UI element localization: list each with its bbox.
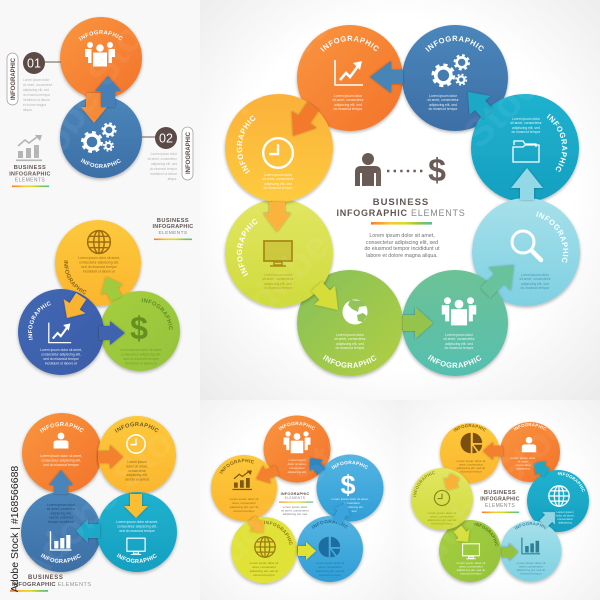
heading: ELEMENTS <box>158 230 188 236</box>
circle: yellow green step: adipiscing elit, sed <box>264 282 292 286</box>
circle: orange: sit amet, <box>517 460 529 464</box>
circle: orange yellow: INFOGRAPHIC <box>219 458 254 474</box>
circle: orange: sed do eiusmod tempor <box>43 463 80 467</box>
arrow: blue to orange <box>49 470 73 494</box>
circle: orange step: adipiscing elit, sed <box>334 103 362 107</box>
circle: teal: Lorem ipsum <box>556 510 574 514</box>
circle: yellow: INFOGRAPHIC <box>114 422 158 433</box>
arrow: yellow to yellow green <box>439 472 463 494</box>
arrow: light blue to teal <box>511 168 543 200</box>
circle: yellow green: amet, consectetur <box>252 565 276 569</box>
circle: blue: INFOGRAPHIC <box>40 553 81 563</box>
circle: green: sed do eiusmod tempor <box>123 357 160 361</box>
circle: orange: adipiscing <box>516 466 530 470</box>
circle: teal: sed do eiusmod tempor <box>119 529 156 533</box>
arrow: orange to yellow <box>281 98 326 144</box>
pill label right: INFOGRAPHIC <box>186 131 192 174</box>
circle: blue step: sit amet, consectetur <box>427 98 460 102</box>
circle: green: consectetur adipiscing elit, <box>121 352 161 356</box>
circle: yellow: Lorem ipsum <box>127 460 147 464</box>
pill label right <box>182 127 193 180</box>
circle: yellow green step: Lorem ipsum dolor <box>264 273 293 277</box>
circle: blue step: INFOGRAPHIC <box>425 36 484 52</box>
circle: light blue: amet, consectetur <box>519 564 543 568</box>
circle: teal step: Lorem ipsum dolor <box>512 117 541 121</box>
circle: orange <box>498 422 562 486</box>
circle: yellow orange step: adipiscing elit, sed <box>264 182 292 186</box>
center text: sit amet, consectetur <box>281 508 309 512</box>
center heading: BUSINESS <box>373 197 429 208</box>
arrow: green to teal green <box>403 307 433 339</box>
arrow: yellow green to green <box>306 277 348 319</box>
circle: orange: consectetur adipiscing elit, <box>41 458 81 462</box>
circle: yellow green: INFOGRAPHIC <box>413 471 435 497</box>
circle: yellow green step: do eiusmod tempor <box>263 286 293 290</box>
circle: yellow: INFOGRAPHIC <box>64 260 86 294</box>
circle: blue: adipiscing elit, <box>345 505 364 509</box>
circle: green: incididunt ut labore et <box>125 362 157 366</box>
circle: orange yellow: Lorem ipsum dolor sit <box>230 497 258 501</box>
arrow: yellow green to green <box>450 523 475 548</box>
panel: main eight-step cycle <box>223 24 582 380</box>
circle: orange yellow: INFOGRAPHIC <box>454 424 486 432</box>
circle: teal step <box>469 94 581 202</box>
circle: navy blue: sed do eiusmod tempor <box>43 357 80 361</box>
arrow: green to yellow <box>95 272 127 304</box>
circle: yellow green: adipiscing elit, sed do <box>250 569 279 573</box>
center: dotted connector <box>387 170 424 172</box>
arrow: blue to orange <box>303 452 328 478</box>
circle: teal: INFOGRAPHIC <box>116 553 157 563</box>
circle: light blue step: INFOGRAPHIC <box>536 211 568 263</box>
center text: Lorem ipsum dolor <box>283 505 307 509</box>
circle: green: adipiscing elit, sed do <box>457 568 486 572</box>
circle: yellow green: INFOGRAPHIC <box>264 520 292 545</box>
circle: orange yellow: amet, consectetur <box>459 462 483 466</box>
circle: blue <box>19 492 100 576</box>
circle: light blue: INFOGRAPHIC <box>312 520 348 529</box>
circle: yellow green: Lorem ipsum dolor sit <box>428 511 456 515</box>
circle: navy blue <box>16 288 105 378</box>
arrow: orange to yellow <box>98 445 123 469</box>
circle: teal: INFOGRAPHIC <box>558 472 585 492</box>
circle: orange step: INFOGRAPHIC <box>320 36 379 52</box>
text block right: sit amet, consectetur <box>148 157 178 161</box>
circle: yellow: sed do eiusmod tempor <box>81 265 118 269</box>
circle: green step: do eiusmod tempor <box>335 346 365 350</box>
watermark: Adobe Stock <box>389 388 593 593</box>
circle: blue <box>314 454 386 525</box>
circle: orange <box>262 415 332 486</box>
circle: light blue: Lorem ipsum dolor sit <box>316 561 344 565</box>
circle: teal step: adipiscing elit, sed <box>512 126 540 130</box>
circle: orange: INFOGRAPHIC <box>78 30 123 41</box>
circle: orange step: sit amet, consectetur <box>332 98 365 102</box>
panel background: bottom right <box>400 400 600 600</box>
heading: INFOGRAPHIC <box>152 224 194 230</box>
badge 01 <box>23 52 61 74</box>
arrow: light blue to teal <box>537 506 561 530</box>
circle: blue: Lorem ipsum dolor <box>47 503 76 507</box>
circle: blue: sit amet, consectur <box>47 507 76 511</box>
text block left: aliqua. <box>23 108 33 112</box>
circle: yellow orange step: INFOGRAPHIC <box>236 116 256 174</box>
heading: INFOGRAPHIC <box>9 172 51 178</box>
center text: adipiscing elit, sed <box>283 512 308 516</box>
pill label left <box>7 53 18 105</box>
center paragraph: consectetur adipiscing elit, sed <box>366 240 438 246</box>
circle: light blue <box>500 520 564 585</box>
circle: yellow green step: sit amet, consectetur <box>262 277 295 281</box>
circle: light blue step: adipiscing elit, sed <box>521 282 549 286</box>
circle: blue: Lorem ipsum dolor sit amet, <box>331 497 369 501</box>
circle: orange <box>58 16 144 99</box>
arrow: yellow to blue <box>56 289 92 325</box>
circle: navy blue: consectetur adipiscing elit, <box>41 352 81 356</box>
center paragraph: do eiusmod tempor incididunt ut <box>364 246 440 252</box>
circle: green: Lorem ipsum dolor sit amet, <box>120 348 162 352</box>
circle: yellow: dolor sit amet, <box>126 464 148 468</box>
circle: navy blue: incididunt ut labore et <box>45 362 77 366</box>
circle: orange: Lorem ipsum dolor <box>511 456 535 460</box>
circle: light blue: eiusmod tempor <box>520 572 542 576</box>
arrow: teal to blue <box>458 83 498 124</box>
circle: yellow green <box>409 468 475 534</box>
circle: green: $ <box>130 310 148 346</box>
circle: yellow green step: INFOGRAPHIC <box>236 219 258 277</box>
circle: orange: INFOGRAPHIC <box>278 422 315 430</box>
circle: teal step: INFOGRAPHIC <box>546 114 568 172</box>
circle: light blue step: sit amet, consectetur <box>519 277 552 281</box>
circle: yellow green <box>229 516 298 586</box>
circle: blue step: Lorem ipsum dolor <box>429 94 458 98</box>
circle: teal green step: sit amet, consectetur <box>443 337 476 341</box>
circle: orange yellow: adipiscing elit, sed do <box>230 505 259 509</box>
circle: teal green step <box>402 270 510 380</box>
circle: orange <box>20 412 101 494</box>
circle: yellow: consectetur adipiscing elit, <box>79 260 119 264</box>
circle: light blue: INFOGRAPHIC <box>514 522 547 530</box>
circle: orange: Lorem ipsum dolor sit amet, <box>40 454 82 458</box>
heading: BUSINESS <box>28 575 63 581</box>
circle: green: INFOGRAPHIC <box>474 522 498 546</box>
circle: teal: adipiscing <box>558 520 572 524</box>
text block left: sit amet, consectetur <box>23 83 53 87</box>
circle: yellow: adipiscing elit, <box>126 473 148 477</box>
circle: orange step: do eiusmod tempor <box>333 107 363 111</box>
circle: green: INFOGRAPHIC <box>142 298 173 330</box>
circle: teal green step: do eiusmod tempor <box>444 346 474 350</box>
circle: yellow: sed do eiusmod <box>125 478 149 482</box>
center heading <box>336 197 466 218</box>
icon: earth <box>342 300 368 324</box>
center heading <box>281 492 309 500</box>
circle: orange: consectetur <box>289 466 305 470</box>
circle: yellow orange step: Lorem ipsum dolor <box>264 173 293 177</box>
circle: yellow <box>53 220 143 310</box>
text block right: incididunt ut labore <box>150 172 177 176</box>
circle: yellow orange step <box>223 94 335 205</box>
circle: green step <box>295 270 404 380</box>
center paragraph: labore et dolore magna aliqua. <box>366 253 438 259</box>
circle: teal: consectetur <box>557 517 573 521</box>
circle: blue: INFOGRAPHIC <box>331 460 368 470</box>
center heading: INFOGRAPHIC <box>480 496 520 502</box>
panel background: main <box>200 0 600 400</box>
heading: ELEMENTS <box>15 178 45 184</box>
circle: teal green step: adipiscing elit, sed <box>445 342 473 346</box>
text block left: do eiusmod tempor <box>23 93 51 97</box>
panel: five-step diagram <box>209 415 386 586</box>
arrow: yellow to green <box>245 513 270 539</box>
circle: orange step <box>295 24 404 134</box>
circle: green step: Lorem ipsum dolor <box>336 333 365 337</box>
circle: green <box>102 290 182 374</box>
circle: teal step: sit amet, consectetur <box>510 121 543 125</box>
circle: orange: INFOGRAPHIC <box>40 422 84 433</box>
panel: four-step diagram <box>10 412 179 592</box>
circle: orange yellow <box>438 422 501 486</box>
heading: BUSINESS <box>14 165 46 171</box>
rainbow bar <box>279 502 313 503</box>
circle: blue <box>58 98 144 182</box>
arrow: teal to blue <box>76 519 100 543</box>
heading: INFOGRAPHIC ELEMENTS <box>12 582 91 588</box>
arrow: orange to yellow <box>483 442 503 460</box>
circle: light blue: adipiscing elit, sed do <box>316 569 345 573</box>
text block right: adipiscing elit, sed <box>151 162 177 166</box>
circle: blue: consectetur <box>344 501 360 505</box>
text block left: adipiscing elit, sed <box>23 88 49 92</box>
circle: teal <box>525 470 591 536</box>
arrow: green to light blue <box>298 542 316 560</box>
badge 02 <box>142 127 177 149</box>
center heading <box>480 490 520 509</box>
circle: yellow green: eiusmod tempor <box>253 573 275 577</box>
circle: orange: adipiscing elit, <box>288 470 307 474</box>
circle: blue: sed <box>352 509 357 513</box>
circle: teal <box>96 492 179 576</box>
rainbow bar <box>154 238 192 240</box>
circle: orange yellow: adipiscing elit, sed do <box>457 466 486 470</box>
circle: yellow green: adipiscing elit, sed do <box>428 518 457 522</box>
arrow: blue to orange <box>370 61 403 93</box>
circle: teal step: do eiusmod tempor <box>511 130 541 134</box>
center heading: BUSINESS <box>484 490 516 496</box>
badge 02: 02 <box>159 132 173 146</box>
text block left: Lorem ipsum dolor <box>23 78 50 82</box>
circle: yellow green: amet, consectetur <box>430 514 454 518</box>
circle: light blue: Lorem ipsum dolor sit <box>517 561 546 565</box>
circle: orange yellow: eiusmod tempor <box>233 509 255 513</box>
circle: yellow orange step: do eiusmod tempor <box>263 186 293 190</box>
circle: orange: consectetur <box>515 463 531 467</box>
icon: gray chart <box>16 135 42 161</box>
watermark: Adobe Stock <box>189 388 393 593</box>
heading <box>9 165 51 184</box>
heading: BUSINESS <box>157 218 189 224</box>
circle: green <box>437 520 502 586</box>
circle: yellow orange step: sit amet, consectetur <box>262 177 295 181</box>
circle: yellow green: eiusmod tempor <box>431 522 453 526</box>
circle: navy blue: Lorem ipsum dolor sit amet, <box>40 348 82 352</box>
circle: yellow <box>96 416 178 494</box>
circle: orange step: Lorem ipsum dolor <box>334 94 363 98</box>
circle: teal: dolor sit amet, <box>556 514 575 518</box>
circle: orange yellow <box>209 454 279 524</box>
circle: teal green step: Lorem ipsum dolor <box>445 333 474 337</box>
circle: orange: INFOGRAPHIC <box>514 423 546 431</box>
circle: green step: sit amet, consectetur <box>334 337 367 341</box>
circle: blue step: do eiusmod tempor <box>428 107 458 111</box>
circle: navy blue: INFOGRAPHIC <box>28 302 51 340</box>
circle: yellow: Lorem ipsum dolor sit amet, <box>78 256 120 260</box>
center heading: INFOGRAPHIC ELEMENTS <box>336 208 466 218</box>
center: rainbow bar <box>371 222 432 225</box>
text block right: Lorem ipsum dolor <box>151 152 178 156</box>
circle: yellow: incididunt ut labore et <box>83 270 115 274</box>
circle: green: amet, consectetur <box>459 564 483 568</box>
circle: blue: $ <box>340 470 356 500</box>
circle: orange yellow: amet, consectetur <box>232 501 256 505</box>
arrow: yellow to yellow green <box>263 202 291 232</box>
panel: two-step diagram <box>6 16 194 188</box>
circle: teal green step: INFOGRAPHIC <box>428 354 482 368</box>
text block left: incididunt ut labore <box>23 98 50 102</box>
circle: blue: adipiscing elit, <box>50 512 72 516</box>
circle: blue: sed do eiusmod <box>49 516 73 520</box>
center paragraph: Lorem ipsum dolor sit amet, <box>369 233 435 239</box>
center heading: INFOGRAPHIC <box>281 492 309 496</box>
circle: yellow green: Lorem ipsum dolor sit <box>250 561 278 565</box>
center icon: person <box>355 153 381 186</box>
watermark: Adobe Stock <box>219 138 423 343</box>
arrow: teal green to light blue <box>474 253 525 304</box>
circle: blue: tempor incididunt <box>48 520 74 524</box>
circle: orange yellow: Lorem ipsum dolor sit <box>457 459 486 463</box>
circle: green step: INFOGRAPHIC <box>322 354 376 368</box>
circle: blue step: adipiscing elit, sed <box>429 103 457 107</box>
arrow: yellow to teal <box>124 494 148 518</box>
panel: three-step diagram <box>16 218 194 378</box>
circle: light blue: eiusmod tempor <box>319 573 341 577</box>
circle: yellow: consectetur <box>128 469 147 473</box>
center heading: ELEMENTS <box>285 496 306 500</box>
arrow: blue up <box>95 76 121 107</box>
rainbow bar <box>482 512 519 513</box>
circle: orange: Lorem ipsum <box>288 458 306 462</box>
rainbow bar <box>10 590 48 592</box>
text block left: et dolore magna <box>23 103 46 107</box>
stock id vertical text: Adobe Stock | #168566688 <box>9 466 21 592</box>
watermark: Adobe Stock <box>9 388 213 593</box>
circle: blue: INFOGRAPHIC <box>80 158 121 168</box>
circle: green step: adipiscing elit, sed <box>336 342 364 346</box>
panel: six-step diagram <box>409 422 591 586</box>
circle: light blue step <box>470 198 582 310</box>
circle: teal: Lorem ipsum dolor sit amet, <box>116 520 158 524</box>
circle: orange: dolor sit amet, <box>288 462 307 466</box>
pill label left: INFOGRAPHIC <box>11 57 17 100</box>
heading <box>12 575 91 588</box>
arrow: orange to yellow <box>252 461 281 488</box>
circle: light blue <box>295 516 365 586</box>
circle: green: eiusmod tempor <box>460 572 482 576</box>
arrow: green to light blue <box>502 543 518 561</box>
arrow: blue to green <box>99 321 125 345</box>
panel background: bottom middle <box>200 400 400 600</box>
center heading: ELEMENTS <box>485 503 515 509</box>
center icon: dollar: $ <box>428 152 446 188</box>
text block right: aliqua. <box>168 177 177 181</box>
arrow: orange down <box>81 93 107 123</box>
circle: yellow green step <box>223 200 335 310</box>
text block right: do eiusmod tempor <box>150 167 178 171</box>
badge 01: 01 <box>27 56 41 70</box>
circle: blue step <box>400 24 510 134</box>
circle: light blue step: Lorem ipsum dolor <box>521 273 550 277</box>
heading <box>152 218 194 236</box>
circle: light blue: adipiscing elit, sed do <box>517 568 546 572</box>
circle: light blue step: do eiusmod tempor <box>520 286 550 290</box>
circle: orange yellow: eiusmod tempor <box>460 470 482 474</box>
arrow: teal to orange <box>528 456 552 480</box>
rainbow bar <box>12 186 49 187</box>
watermark: Adobe Stock <box>359 48 563 253</box>
circle: teal: consectetur adipiscing elit, <box>117 524 157 528</box>
circle: light blue: amet, consectetur <box>318 565 342 569</box>
circle: green: Lorem ipsum dolor sit <box>457 561 486 565</box>
arrow: light blue to blue <box>329 499 355 527</box>
